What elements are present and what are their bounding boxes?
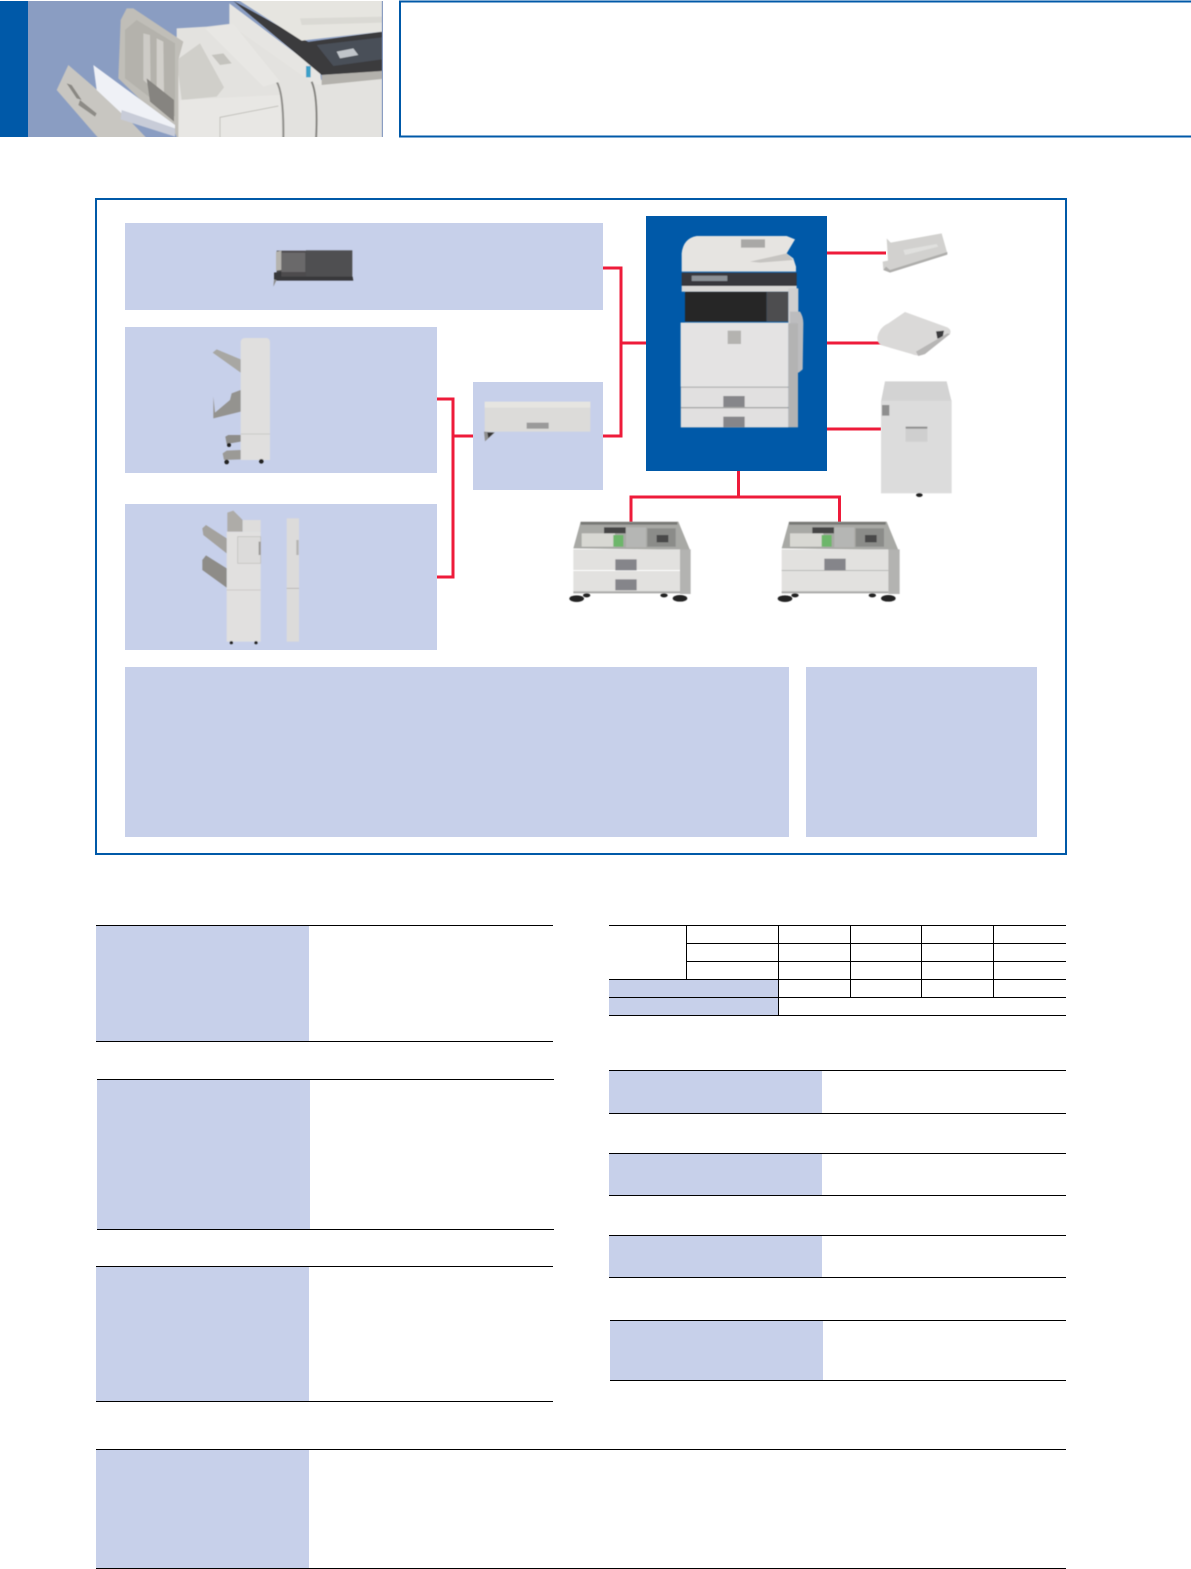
panel: options notes wide (125, 667, 789, 837)
icon: single-tier stand (778, 522, 900, 602)
panel: main machine (646, 216, 827, 471)
main system diagram frame (96, 199, 1066, 854)
icon: exit tray (883, 233, 947, 273)
spec table 4 (96, 1449, 1066, 1568)
panel: options notes narrow (806, 667, 1037, 837)
header photo right edge (382, 1, 383, 137)
right spec table 4 (610, 1320, 1066, 1381)
icon: large capacity cassette (881, 381, 952, 497)
spec table 1 (96, 925, 553, 1042)
right spec table 1 (609, 1070, 1066, 1114)
connector lines (437, 253, 886, 577)
icon: main copier (681, 236, 803, 427)
icon: saddle finisher (213, 338, 270, 464)
spec table 2 (97, 1079, 554, 1230)
panel: paper pass unit (473, 382, 603, 490)
spec table 3 (96, 1266, 553, 1402)
icon: large finisher with side unit (202, 511, 299, 644)
panel: floor finisher (125, 504, 437, 650)
panel: top option (125, 223, 603, 310)
header blue tab (0, 1, 28, 137)
right spec table 3 (609, 1235, 1066, 1278)
right spec table 2 (609, 1153, 1066, 1196)
icon: inner finisher (273, 250, 353, 287)
panel: finisher (125, 327, 437, 473)
icon: pass unit (484, 402, 590, 441)
paper size grid table (609, 925, 1066, 1016)
header title box (400, 2, 1191, 136)
icon: two-tier stand (569, 522, 691, 602)
icon: network box (877, 312, 951, 356)
header photo: finisher and machine (28, 0, 382, 140)
